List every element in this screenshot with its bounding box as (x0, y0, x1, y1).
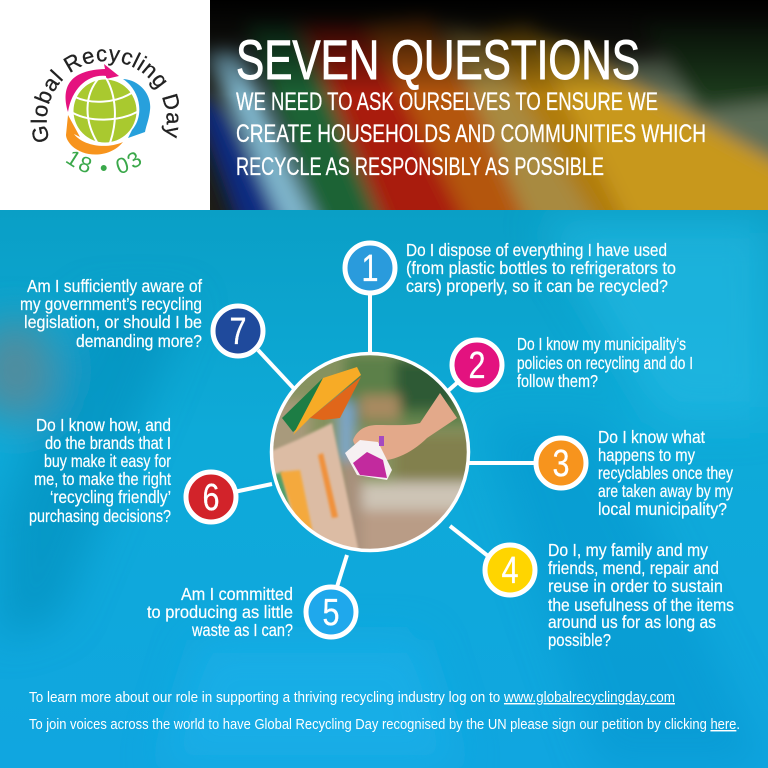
question 4 badge: 4 (502, 550, 518, 592)
photo: hand dropping paper into recycling bin (270, 352, 470, 552)
question 5 text: Am I committed (181, 584, 293, 604)
question 3 text: local municipality? (598, 499, 727, 519)
question 5 text: waste as I can? (191, 620, 293, 640)
footer links text (29, 690, 740, 733)
question 1 badge: 1 (362, 248, 378, 290)
question 4 text: reuse in order to sustain (548, 576, 723, 596)
question 7 text: legislation, or should I be (24, 312, 202, 332)
question 2 text: policies on recycling and do I (517, 353, 693, 373)
question 2 badge (452, 340, 502, 390)
question 6 text: Do I know how, and (36, 415, 171, 435)
question 4 text: possible? (548, 630, 611, 650)
question 6 text: purchasing decisions? (29, 506, 171, 526)
title: SEVEN QUESTIONS (236, 28, 640, 91)
question 5 text: to producing as little (147, 602, 293, 622)
question 4 badge (485, 545, 535, 595)
question 3 text: Do I know what (598, 427, 705, 447)
question 7 text: Am I sufficiently aware of (27, 276, 202, 296)
subtitle: RECYCLE AS RESPONSIBLY AS POSSIBLE (236, 153, 604, 181)
question 3 text: happens to my (598, 445, 695, 465)
question 7 badge (213, 306, 263, 356)
question 4 text (548, 540, 734, 650)
icon: Global Recycling Day logo: 18 • 03 (66, 152, 142, 173)
question 1 text (406, 240, 676, 296)
question 2 badge: 2 (468, 345, 486, 387)
question 3 badge: 3 (552, 443, 570, 485)
question 6 text: do the brands that I (45, 433, 171, 453)
question 7 badge: 7 (230, 311, 246, 353)
icon: Global Recycling Day logo: Global Recycling Day (30, 49, 179, 142)
question 4 text: around us for as long as (548, 612, 716, 632)
footer links text: To join voices across the world to have Global Recycling Day recognised by the UN please sign our petition by clicking here. (29, 717, 740, 733)
question 3 badge (536, 438, 586, 488)
question 3 text: recyclables once they (598, 463, 733, 483)
question 4 text: Do I, my family and my (548, 540, 708, 560)
question 7 text: my government’s recycling (20, 294, 202, 314)
question 4 text: the usefulness of the items (548, 595, 734, 615)
question 6 text: me, to make the right (34, 469, 171, 489)
question 6 badge (186, 472, 236, 522)
question 4 text: friends, mend, repair and (548, 558, 719, 578)
question 6 text: buy make it easy for (44, 451, 171, 471)
subtitle (236, 88, 706, 181)
panel: header photo of coloured recycling bins (210, 0, 768, 210)
question 3 text: are taken away by my (598, 481, 733, 501)
question 3 text (598, 427, 733, 519)
question 1 badge (345, 243, 395, 293)
panel: blue background (0, 210, 768, 768)
question 5 text (147, 584, 293, 640)
panel: white logo box (0, 0, 210, 210)
connector lines (234, 290, 538, 590)
question 2 text (517, 334, 693, 391)
question 5 badge: 5 (322, 592, 340, 634)
question 6 text (29, 415, 171, 526)
question 6 badge: 6 (202, 477, 220, 519)
question 7 text: demanding more? (76, 331, 202, 351)
icon: Global Recycling Day logo (30, 49, 179, 173)
question 5 badge (306, 587, 356, 637)
question 2 text: Do I know my municipality’s (517, 334, 686, 354)
question 1 text: (from plastic bottles to refrigerators to (406, 258, 676, 278)
footer links text: To learn more about our role in supporting a thriving recycling industry log on to www.globalrecyclingday.com (29, 690, 675, 706)
question 2 text: follow them? (517, 371, 598, 391)
question 1 text: cars) properly, so it can be recycled? (406, 276, 668, 296)
question 6 text: ‘recycling friendly’ (50, 487, 171, 507)
question 7 text (20, 276, 202, 351)
question 1 text: Do I dispose of everything I have used (406, 240, 667, 260)
